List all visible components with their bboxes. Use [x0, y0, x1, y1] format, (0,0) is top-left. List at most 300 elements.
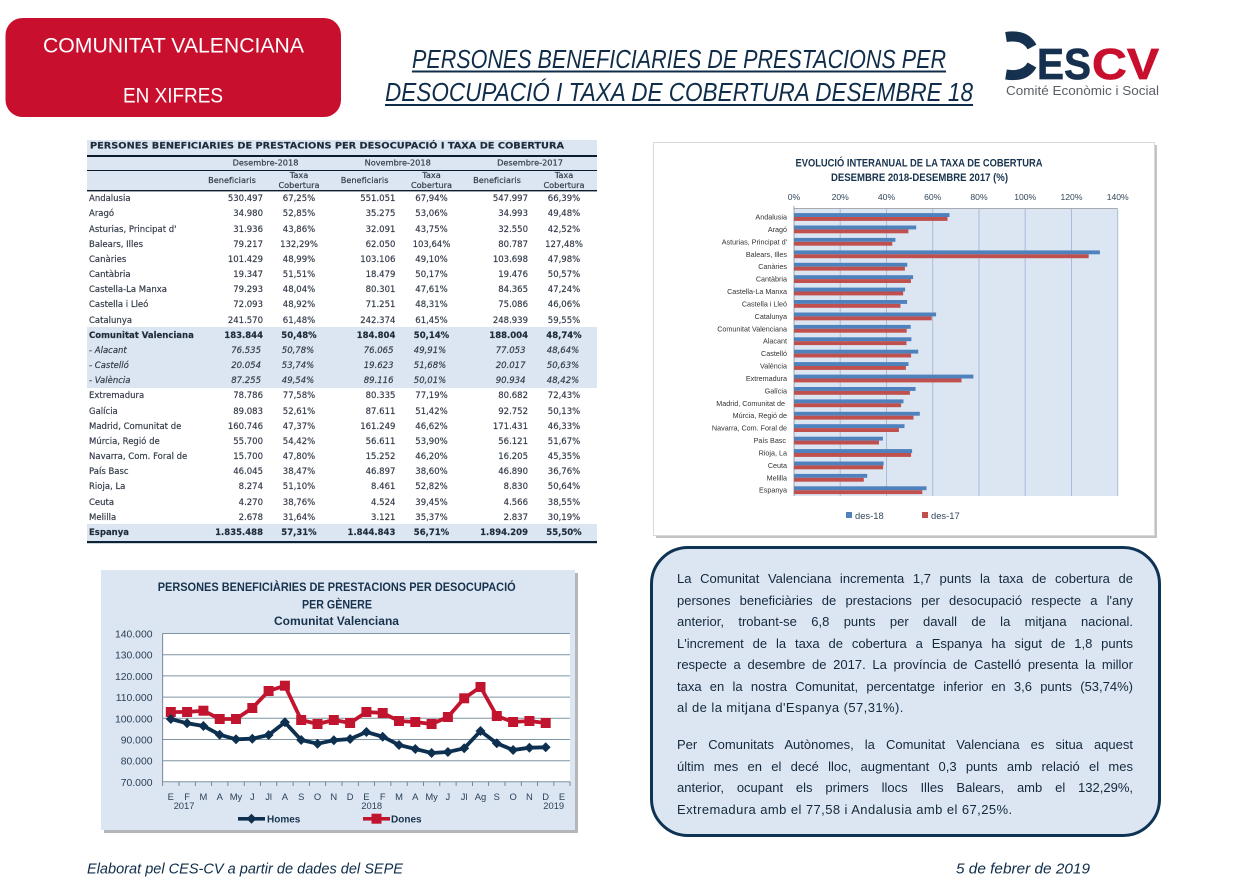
line chart axes: E [168, 791, 174, 802]
row: Alacant [89, 346, 579, 356]
row: Múrcia: 55.700 [233, 437, 263, 447]
logo: CESCV: CV [1092, 40, 1160, 89]
row: Múrcia: Múrcia, Regió de [89, 436, 160, 447]
row: Galícia: Galícia [89, 407, 118, 417]
bars by territory: Castella-La Manxa [727, 287, 787, 296]
row: Extremadura: 77,19% [415, 391, 448, 401]
row: Aragó: 34.993 [498, 209, 528, 219]
line series: Dones [166, 681, 551, 729]
row: Melilla: Melilla [89, 513, 116, 523]
line chart axes: O [509, 791, 517, 802]
paragraph: taxa de cobertura: L'increment de la taxa de cobertura a Espanya ha sigut de 1,8 punts [677, 636, 1133, 651]
row: Castella-La Manxa: 48,04% [283, 285, 315, 295]
bars by territory: Melilla [767, 473, 787, 482]
row: Galícia: 51,42% [415, 407, 448, 417]
row: País Basc: 46.897 [366, 467, 395, 477]
row: Castella i Lleó: 71.251 [366, 300, 395, 310]
row: Extremadura: 80.682 [498, 391, 528, 401]
row: Asturias: Asturias, Principat d' [89, 225, 176, 235]
line chart legend [238, 814, 422, 825]
row: Espanya: 55,50% [546, 528, 582, 538]
bars by territory: Galícia [765, 386, 787, 395]
paragraph: comunitats autònomes: Per Comunitats Autònomes, la Comunitat Valenciana es situa aquest [677, 737, 1133, 752]
table column headers: Desembre-2018 [233, 158, 298, 168]
row: Alacant: 76.065 [364, 346, 394, 356]
logo: CESCV: Comité Econòmic i Social [1006, 84, 1159, 98]
row: Madrid: 46,62% [415, 422, 448, 432]
row: Melilla: 3.121 [371, 513, 395, 523]
bar chart axis: 0% [788, 192, 801, 202]
row: Catalunya: 248.939 [493, 316, 528, 326]
table column headers [87, 157, 597, 191]
row: Melilla: 31,64% [283, 513, 315, 523]
table column headers: Cobertura [278, 180, 320, 190]
row: Comunitat Valenciana: 50,48% [281, 331, 317, 341]
bars by territory: Comunitat Valenciana [717, 324, 787, 333]
row: Aragó: 52,85% [283, 209, 315, 219]
line chart axes: 80.000 [121, 757, 153, 768]
line chart axes: 100.000 [115, 714, 153, 725]
bars by territory: Castelló [761, 349, 787, 358]
row: Asturias: 42,52% [548, 225, 580, 235]
row: Múrcia: 54,42% [283, 437, 315, 447]
row: Galícia: 89.083 [233, 407, 263, 417]
row: Andalusia: 66,39% [548, 194, 580, 204]
row: Canàries: 48,99% [283, 255, 315, 265]
row: València: 48,42% [547, 376, 579, 386]
table column headers: Cobertura [411, 180, 452, 190]
line chart axes: J [250, 791, 255, 802]
row: Madrid: 161.249 [360, 422, 395, 432]
row: Navarra: 15.252 [366, 452, 395, 462]
bars by territory: Navarra, Com. Foral de [712, 424, 787, 433]
paragraph: comunitats autònomes: anterior, ocupant els primers llocs Illes Balears, amb el 132,29%, [677, 780, 1133, 795]
row: Catalunya: 242.374 [360, 316, 395, 326]
row: Castella i Lleó: 75.086 [498, 300, 528, 310]
row: Andalusia: 67,25% [283, 194, 315, 204]
line chart axes: My [425, 791, 438, 802]
row: Ceuta [89, 498, 580, 508]
row: Castella-La Manxa: 84.365 [498, 285, 528, 295]
row: Múrcia: 53,90% [415, 437, 448, 447]
line chart legend: Homes [267, 814, 301, 825]
row: Aragó: 53,06% [415, 209, 448, 219]
bar chart title [796, 156, 1043, 184]
row: València: 50,01% [414, 376, 446, 386]
row: Aragó: 34.980 [233, 209, 263, 219]
row: Aragó: 35.275 [366, 209, 395, 219]
bars by territory: Andalusia [755, 212, 787, 222]
line chart axes: M [199, 791, 207, 802]
paragraph: comunitats autònomes: últim mes en el decé lloc, augmentant 0,3 punts amb relació el mes [677, 759, 1133, 774]
paragraph: comunitats autònomes [677, 737, 1133, 817]
row: País Basc: País Basc [89, 467, 129, 477]
row: Extremadura [89, 391, 580, 401]
line chart axes: E [363, 791, 370, 802]
table column headers: Cobertura [543, 180, 585, 190]
row: Canàries: 103.106 [360, 255, 395, 265]
bars by territory: Castella i Lleó [742, 299, 787, 308]
line chart axes: 110.000 [116, 693, 153, 704]
main title [385, 46, 974, 107]
bars by territory: Rioja, La [759, 448, 787, 458]
row: Madrid: 171.431 [493, 422, 528, 432]
table column headers: Taxa [554, 170, 573, 180]
row: Canàries [89, 255, 580, 265]
row: Extremadura: 72,43% [548, 391, 580, 401]
row: Galícia: 50,13% [548, 407, 580, 417]
bar chart axis: 80% [970, 192, 988, 202]
row: Cantàbria: 19.476 [498, 270, 528, 280]
row: País Basc: 38,60% [415, 467, 448, 477]
bars by territory [712, 212, 1100, 495]
row: Navarra [89, 452, 580, 462]
row: Navarra: 46,20% [415, 452, 448, 462]
line chart axes: 2018 [361, 800, 382, 811]
row: Múrcia: 56.121 [498, 437, 528, 447]
table column headers: Desembre-2017 [497, 158, 563, 168]
row: Castelló: - Castelló [89, 360, 129, 371]
bars by territory: Aragó [768, 225, 787, 234]
row: Comunitat Valenciana: 50,14% [414, 331, 450, 341]
row: Balears: 127,48% [545, 240, 583, 250]
row: Catalunya: Catalunya [89, 316, 132, 326]
row: Castella i Lleó: 72.093 [233, 300, 263, 310]
row: Ceuta: 4.524 [371, 498, 395, 508]
row: Espanya: 57,31% [281, 528, 317, 538]
row: Rioja [89, 482, 580, 492]
row: Espanya: 1.894.209 [480, 528, 528, 538]
bar chart title: EVOLUCIÓ INTERANUAL DE LA TAXA DE COBERTURA [796, 156, 1043, 170]
line chart axes: A [282, 791, 289, 802]
bar chart axis: 40% [878, 192, 895, 202]
row: Asturias: 43,75% [415, 225, 448, 235]
header badge: Comunitat Valenciana en xifres: EN XIFRES [123, 84, 223, 108]
table column headers: Novembre-2018 [365, 158, 431, 168]
row: Madrid: 47,37% [283, 422, 315, 432]
row: Aragó: 49,48% [548, 209, 580, 219]
row: Ceuta: 39,45% [415, 498, 448, 508]
bars by territory: Extremadura [746, 374, 787, 383]
table: persones beneficiaries [87, 140, 597, 543]
line chart axes: 2019 [543, 800, 564, 811]
row: País Basc [89, 467, 580, 477]
row: Madrid: Madrid, Comunitat de [89, 422, 181, 432]
paragraph: taxa de cobertura: La Comunitat Valenciana incrementa 1,7 punts la taxa de cobertura de [677, 571, 1133, 586]
bars by territory: Madrid, Comunitat de [716, 399, 785, 408]
row: Asturias: 31.936 [233, 225, 263, 235]
row: València: 89.116 [364, 376, 394, 386]
row: Castella-La Manxa: 79.293 [233, 285, 263, 295]
row: Andalusia: Andalusia [89, 194, 131, 204]
row: Castella-La Manxa: Castella-La Manxa [89, 285, 167, 295]
line chart axes: F [380, 791, 386, 802]
row: Castella-La Manxa: 47,24% [548, 285, 580, 295]
bar chart legend: des-17 [931, 510, 960, 521]
row: Ceuta: Ceuta [89, 498, 114, 508]
row: Navarra: 47,80% [283, 452, 315, 462]
row: Catalunya: 61,48% [283, 316, 315, 326]
row: Catalunya: 61,45% [415, 316, 448, 326]
row: Melilla: 2.837 [504, 513, 528, 523]
row: Canàries: Canàries [89, 255, 127, 265]
row: Alacant: 77.053 [496, 346, 526, 356]
paragraph: taxa de cobertura: al de la mitjana d'Espanya (57,31%). [677, 700, 904, 715]
line chart axes: S [298, 791, 304, 802]
bars by territory: Asturias, Principat d' [722, 237, 788, 246]
row: Canàries: 103.698 [493, 255, 528, 265]
line chart axes: M [395, 791, 403, 802]
row: Castella i Lleó: Castella i Lleó [89, 299, 148, 310]
line chart axes: D [542, 791, 549, 802]
line chart axes: O [314, 791, 321, 802]
row: Castella-La Manxa: 47,61% [415, 285, 448, 295]
row: Espanya: 1.844.843 [348, 528, 395, 538]
bars by territory: Canàries [758, 262, 787, 271]
line chart axes: 90.000 [121, 736, 153, 746]
bar chart legend: des-18 [855, 510, 884, 521]
row: Castelló: 20.054 [231, 361, 261, 371]
row: Rioja: 8.461 [371, 482, 395, 492]
row: Rioja: Rioja, La [89, 482, 125, 492]
bars by territory: Ceuta [768, 461, 787, 470]
row: València [89, 375, 579, 386]
line chart axes: 130.000 [115, 651, 153, 662]
row: Galícia: 52,61% [283, 407, 315, 417]
line chart legend: Dones [391, 814, 422, 825]
row: Extremadura: 77,58% [283, 391, 315, 401]
row: Canàries: 47,98% [548, 255, 580, 265]
bars by territory: Catalunya [755, 312, 787, 321]
row: Melilla: 35,37% [415, 513, 448, 523]
bar chart axis [788, 192, 1129, 496]
row: Ceuta: 38,76% [283, 498, 315, 508]
row: Rioja: 50,64% [548, 482, 580, 492]
logo: CESCV [1006, 36, 1160, 98]
row: Espanya: Espanya [89, 528, 129, 538]
line chart axes [115, 630, 570, 811]
row: País Basc: 36,76% [548, 467, 580, 477]
line chart axes: F [184, 791, 190, 802]
row: Catalunya: 59,55% [548, 316, 580, 326]
bars by territory: Alacant [763, 337, 787, 346]
row: Comunitat Valenciana: 188.004 [489, 331, 528, 341]
row: Andalusia: 551.051 [360, 194, 395, 204]
row: País Basc: 46.890 [498, 467, 528, 477]
row: València: - València [89, 375, 130, 386]
table column headers: Beneficiaris [208, 175, 256, 185]
row: Castelló: 19.623 [364, 361, 394, 371]
row: Castelló: 50,63% [547, 361, 579, 371]
row: Ceuta: 38,55% [548, 498, 580, 508]
line chart axes: S [494, 791, 500, 802]
row: Galícia: 92.752 [498, 407, 528, 417]
row: Cantàbria: 18.479 [366, 270, 395, 280]
table column headers: Beneficiaris [341, 175, 388, 185]
line chart axes: 70.000 [121, 778, 153, 789]
row: Catalunya [89, 316, 580, 326]
row: Comunitat Valenciana: 48,74% [546, 331, 582, 341]
line chart axes: A [412, 791, 419, 802]
bars by territory: Espanya [759, 486, 787, 495]
row: Alacant: - Alacant [89, 346, 127, 356]
row: Extremadura: Extremadura [89, 391, 144, 401]
footer: source: Elaborat pel CES-CV a partir de dades del SEPE [87, 860, 404, 878]
bar chart axis: 100% [1014, 192, 1037, 202]
row: Balears [89, 240, 583, 250]
bars by territory: Balears, Illes [746, 250, 787, 259]
bars by territory: Cantàbria [756, 275, 787, 284]
row: Comunitat Valenciana [89, 331, 582, 341]
table title band [87, 140, 597, 157]
row: Castelló: 51,68% [414, 361, 446, 371]
bar chart axis: 60% [924, 192, 942, 202]
line chart axes: 120.000 [115, 672, 153, 683]
line chart title [158, 579, 516, 628]
bars by territory: València [760, 362, 787, 370]
line chart axes: Ag [475, 791, 486, 802]
paragraph: taxa de cobertura: persones beneficiàries de prestacions per desocupació respecte a l'any [677, 593, 1133, 608]
row: Canàries: 49,10% [415, 255, 448, 265]
row: Madrid [89, 422, 580, 432]
row: Balears: 103,64% [413, 240, 450, 250]
line chart axes: E [559, 791, 565, 802]
row: València: 90.934 [496, 376, 526, 386]
paragraph: taxa de cobertura [677, 571, 1133, 715]
row: Balears: Balears, Illes [89, 240, 144, 250]
row: Alacant: 49,91% [414, 346, 446, 356]
paragraph: taxa de cobertura: respecte a desembre de 2017. La província de Castelló presenta la millor [677, 657, 1133, 672]
row: Comunitat Valenciana: 184.804 [357, 331, 395, 341]
bar chart axis: 20% [832, 192, 849, 202]
row: Navarra: 15.700 [233, 452, 263, 462]
row: Aragó: Aragó [89, 208, 114, 219]
bars by territory: País Basc [754, 436, 786, 445]
row: Extremadura: 80.335 [366, 391, 395, 401]
row: Múrcia: 51,67% [548, 437, 580, 447]
footer: date: 5 de febrer de 2019 [956, 860, 1091, 878]
row: Galícia [89, 407, 580, 417]
row: Comunitat Valenciana: Comunitat Valenciana [89, 331, 194, 341]
row: Navarra: Navarra, Com. Foral de [89, 452, 187, 462]
main title: PERSONES BENEFICIARIES DE PRESTACIONS PER [412, 46, 946, 74]
row: Andalusia [89, 194, 580, 204]
row: Castelló [89, 360, 579, 371]
table column headers: Taxa [421, 170, 441, 180]
logo: CESCV: ES [1037, 40, 1091, 89]
header badge: Comunitat Valenciana en xifres [6, 18, 341, 117]
row: Comunitat Valenciana: 183.844 [224, 331, 263, 341]
bars by territory: Múrcia, Regió de [733, 411, 787, 420]
row: Balears: 80.787 [498, 240, 528, 250]
header badge: Comunitat Valenciana en xifres: COMUNITAT VALENCIANA [43, 34, 305, 58]
row: Ceuta: 4.270 [239, 498, 263, 508]
row: Castelló: 20.017 [496, 361, 526, 371]
row: Galícia: 87.611 [366, 407, 395, 417]
bar chart legend [846, 510, 960, 521]
row: Cantàbria: 50,17% [415, 270, 448, 280]
bar chart title: DESEMBRE 2018-DESEMBRE 2017 (%) [831, 172, 1008, 184]
line chart axes: Jl [265, 791, 272, 802]
row: Navarra: 16.205 [498, 452, 528, 462]
row: Alacant: 48,64% [547, 346, 579, 356]
row: Andalusia: 67,94% [415, 194, 448, 204]
panel: bar chart evolució interanual [654, 142, 1157, 538]
row: Espanya: 1.835.488 [215, 528, 263, 538]
line chart axes: N [526, 791, 533, 802]
line chart title: PERSONES BENEFICIÀRIES DE PRESTACIONS PER DESOCUPACIÓ [158, 579, 516, 594]
line chart title: PER GÈNERE [302, 597, 372, 612]
row: Balears: 62.050 [366, 240, 395, 250]
line chart axes: N [330, 791, 337, 802]
row: Castella i Lleó: 46,06% [548, 300, 580, 310]
line series: Homes [166, 714, 551, 758]
row: Asturias: 32.550 [498, 225, 528, 235]
highlighted bands [87, 327, 597, 543]
table column headers: Beneficiaris [473, 175, 521, 185]
row: Balears: 132,29% [280, 240, 318, 250]
row: País Basc: 46.045 [233, 467, 263, 477]
panel: line chart per gènere [101, 570, 578, 833]
row: Andalusia: 530.497 [228, 194, 263, 204]
bar chart axis: 140% [1107, 192, 1129, 202]
row: Castella-La Manxa: 80.301 [366, 285, 395, 295]
row: Madrid: 160.746 [228, 422, 263, 432]
paragraph: taxa de cobertura: taxa en la nostra Comunitat, percentatge inferior en 3,6 punts (53,74%) [677, 679, 1133, 694]
table title band: PERSONES BENEFICIARIES DE PRESTACIONS PER DESOCUPACIÓ I TAXA DE COBERTURA [90, 140, 564, 152]
row: Espanya: 56,71% [414, 528, 450, 538]
line chart axes: D [347, 791, 354, 802]
row: Asturias: 43,86% [283, 225, 315, 235]
row: Aragó [89, 208, 580, 219]
row: Navarra: 45,35% [548, 452, 580, 462]
panel: text commentary [650, 546, 1161, 837]
row: Cantàbria [89, 270, 580, 280]
table column headers: Taxa [289, 170, 308, 180]
line chart title: Comunitat Valenciana [274, 614, 399, 628]
row: Cantàbria: 51,51% [283, 270, 315, 280]
row: Castella i Lleó: 48,31% [415, 300, 448, 310]
row: Castella-La Manxa [89, 285, 580, 295]
row: Rioja: 51,10% [283, 482, 315, 492]
row: Melilla: 2.678 [239, 513, 263, 523]
row: Castella i Lleó [89, 299, 580, 310]
line chart axes: 140.000 [115, 630, 153, 640]
row: Madrid: 46,33% [548, 422, 580, 432]
row: Asturias [89, 225, 580, 235]
row: Melilla [89, 513, 580, 523]
bar chart axis: 120% [1061, 192, 1083, 202]
row: Extremadura: 78.786 [233, 391, 263, 401]
row: Ceuta: 4.566 [504, 498, 528, 508]
row: Balears: 79.217 [233, 240, 263, 250]
line chart axes: A [217, 791, 224, 802]
line chart axes: J [446, 791, 450, 802]
row: Rioja: 8.274 [239, 482, 263, 492]
row: València: 49,54% [282, 376, 314, 386]
line chart axes: Jl [461, 791, 468, 802]
main title: DESOCUPACIÓ I TAXA DE COBERTURA DESEMBRE 18 [385, 78, 974, 107]
row: València: 87.255 [231, 376, 261, 386]
row: Cantàbria: 19.347 [233, 270, 263, 280]
paragraph: comunitats autònomes: Extremadura amb el 77,58 i Andalusia amb el 67,25%. [677, 802, 1013, 817]
row: Castelló: 53,74% [282, 361, 314, 371]
row: Canàries: 101.429 [228, 255, 263, 265]
row: Cantàbria: 50,57% [548, 270, 580, 280]
row: Múrcia [89, 436, 580, 447]
line chart axes: 2017 [174, 800, 194, 811]
row: Andalusia: 547.997 [493, 194, 528, 204]
